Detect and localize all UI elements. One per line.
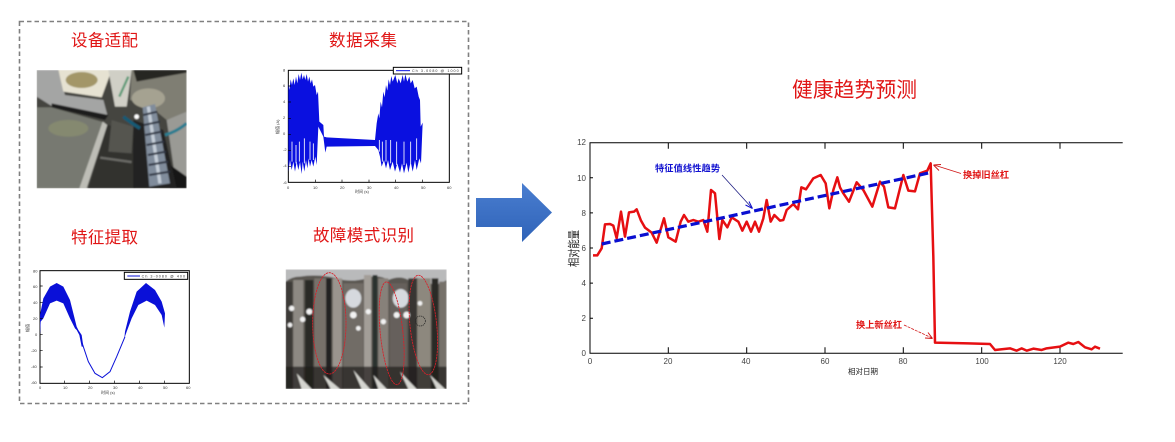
y axis labels: 6: [582, 244, 587, 253]
axis tick labels: 20: [340, 185, 345, 190]
axis tick labels: 幅值 (A): [274, 119, 280, 134]
callout: old screw replaced: 换掉旧丝杠: [963, 169, 1009, 180]
x axis title: 相对日期: [848, 366, 878, 376]
arrow: process to prediction: [476, 183, 552, 242]
fault marker circle: [415, 316, 425, 326]
arrow: old screw leader: [934, 164, 961, 174]
axis tick labels: [274, 68, 452, 194]
y axis title: 相对能量: [567, 230, 581, 267]
axis tick labels: 20: [33, 316, 38, 321]
photo: machine tool lead screw: [37, 70, 187, 188]
x axis labels: 20: [664, 357, 673, 366]
legend: Ch 3-0080 @ 1000: [412, 69, 459, 73]
blue linear trend line: [602, 173, 930, 244]
axis tick labels: 4: [283, 99, 286, 104]
y axis labels: 4: [582, 279, 587, 288]
axis tick labels: 50: [421, 185, 426, 190]
axis tick labels: [24, 268, 191, 395]
x axis labels: [588, 357, 1067, 366]
legend: Ch 3-0080 @ 400: [142, 274, 185, 278]
axis tick labels: 50: [163, 385, 168, 390]
axis tick labels: 时间 (s): [101, 389, 115, 395]
x axis labels: 120: [1053, 357, 1067, 366]
x axis labels: 80: [899, 357, 908, 366]
y axis labels: 0: [582, 349, 587, 358]
y axis labels: 2: [582, 314, 587, 323]
axis ticks: [288, 86, 423, 182]
x axis labels: 100: [975, 357, 989, 366]
axis tick labels: -20: [31, 348, 38, 353]
axis tick labels: 0: [283, 131, 286, 136]
plot frame: [40, 271, 189, 383]
axis tick labels: 10: [313, 185, 318, 190]
heading: fault mode recognition: 故障模式识别: [313, 226, 414, 245]
axis tick labels: -40: [31, 364, 38, 369]
axis tick labels: 30: [367, 185, 372, 190]
callout: linear trend: 特征值线性趋势: [655, 162, 720, 174]
axis tick labels: 0: [35, 332, 38, 337]
axis tick labels: 0: [287, 185, 290, 190]
feature band: [40, 283, 165, 378]
heading: health trend prediction: 健康趋势预测: [792, 79, 917, 102]
axis tick labels: 80: [33, 268, 38, 274]
chart: raw vibration signal: [274, 67, 462, 194]
x axis labels: 40: [742, 357, 751, 366]
axis tick labels: 60: [186, 385, 191, 390]
chart: health trend: [567, 138, 1123, 376]
signal envelope: [288, 73, 423, 174]
legend: [393, 67, 462, 74]
axis tick labels: 10: [63, 385, 68, 390]
axis tick labels: 6: [283, 83, 286, 88]
x axis labels: 60: [821, 357, 830, 366]
y axis labels: 12: [577, 138, 587, 147]
axis tick labels: 40: [394, 185, 399, 190]
axis ticks: [40, 286, 164, 383]
axis tick labels: 0: [39, 385, 42, 390]
axis tick labels: 30: [113, 385, 118, 390]
arrow: trend callout leader: [722, 175, 752, 208]
callout: new screw installed: 换上新丝杠: [856, 319, 902, 330]
axis tick labels: 8: [283, 68, 286, 72]
axis tick labels: 幅值: [24, 324, 30, 332]
axis tick labels: 60: [447, 185, 452, 190]
axis tick labels: -4: [283, 163, 287, 168]
axis tick labels: 60: [33, 284, 38, 289]
photo: worn lead screw with fault marks: [286, 269, 447, 389]
legend: [124, 272, 188, 279]
axis tick labels: -60: [31, 380, 38, 385]
axis tick labels: -2: [283, 147, 287, 152]
plot frame: [288, 70, 449, 182]
y axis labels: 8: [582, 209, 587, 218]
heading: feature extraction: 特征提取: [71, 228, 138, 247]
axis tick labels: 时间 (s): [355, 188, 369, 194]
y axis labels: 10: [577, 174, 587, 183]
heading: equipment adaptation: 设备适配: [71, 31, 138, 50]
axis tick labels: 20: [88, 385, 93, 390]
heading: data acquisition: 数据采集: [329, 31, 397, 50]
axis tick labels: 2: [283, 115, 286, 120]
arrow: new screw leader: [904, 325, 932, 338]
red fault outlines: [313, 273, 442, 386]
axis tick labels: 40: [138, 385, 143, 390]
axes: [590, 143, 1123, 353]
panel: process steps dashed box: [20, 22, 468, 404]
axis ticks: [590, 143, 1060, 353]
chart: extracted feature curve: [24, 268, 191, 395]
axis tick labels: -6: [283, 180, 287, 185]
axis tick labels: 40: [33, 300, 38, 305]
x axis labels: 0: [588, 357, 593, 366]
y axis labels: [577, 138, 587, 358]
red health curve: [593, 163, 1100, 351]
